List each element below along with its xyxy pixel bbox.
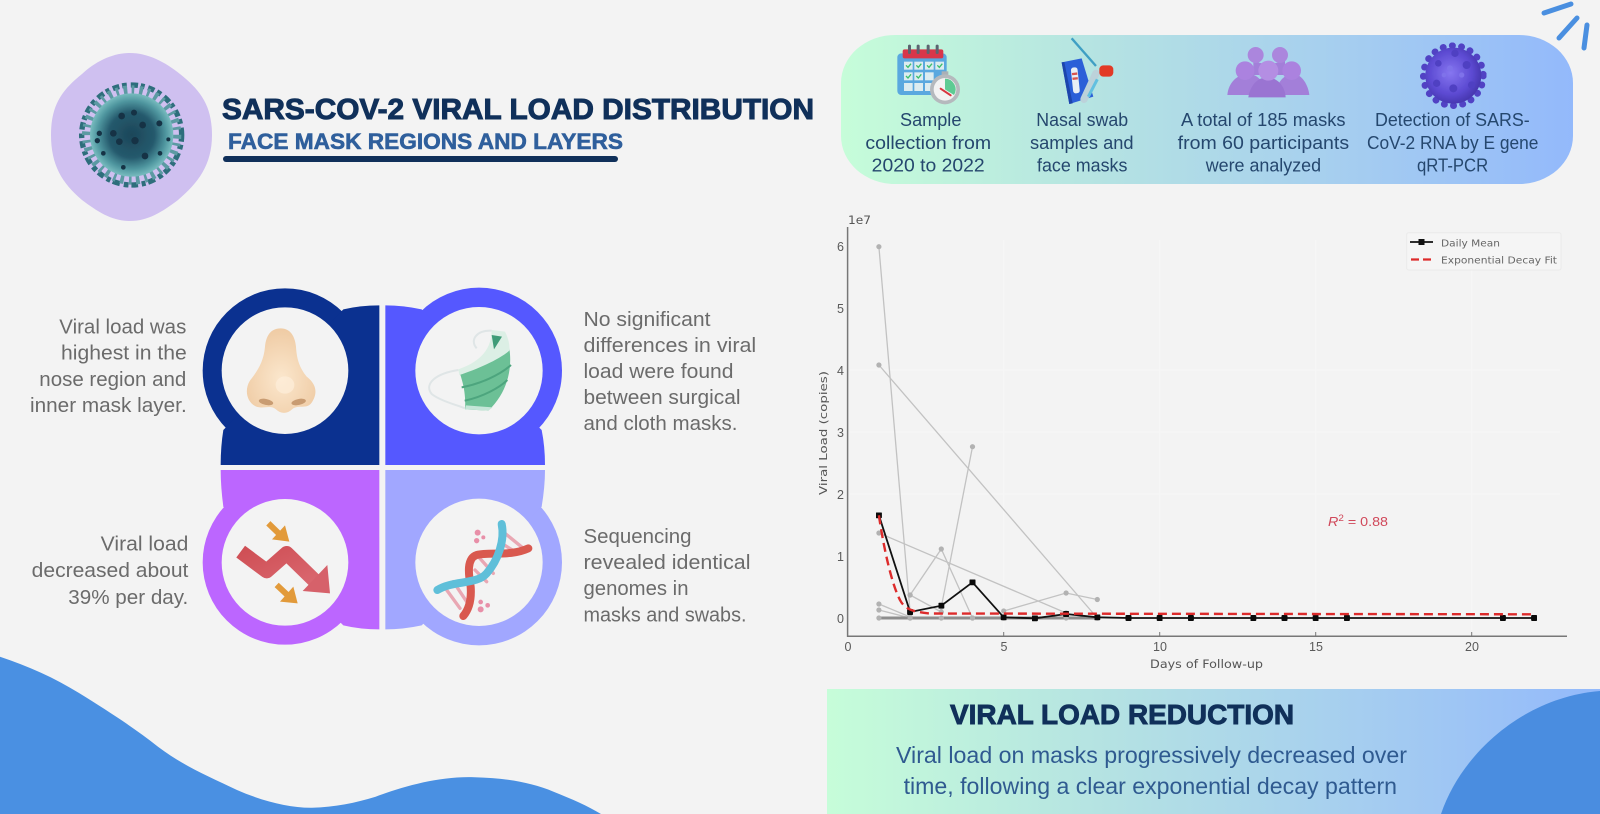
title: SARS-COV-2 VIRAL LOAD DISTRIBUTION [222, 94, 814, 126]
text: sequencing finding [584, 526, 750, 627]
y tick labels: 4 [837, 364, 844, 378]
exponential fit curve [879, 515, 1534, 614]
y tick labels: 5 [837, 302, 844, 316]
text: decline finding: Viral load [101, 534, 188, 556]
x axis title: Days of Follow-up [1150, 657, 1263, 671]
icon: purple virus [1423, 46, 1483, 106]
reduction panel background [827, 689, 1600, 814]
r-squared annotation: R [1328, 514, 1338, 529]
text: decline finding: 39% per day. [68, 587, 188, 609]
icon: surgical mask [429, 330, 511, 411]
quadrant: decline [203, 470, 379, 645]
legend: Daily Mean [1441, 238, 1500, 250]
x tick labels: 15 [1309, 640, 1323, 654]
icon: coronavirus [82, 85, 182, 185]
text: nasal swab: Nasal swab [1036, 110, 1128, 130]
badge blob [51, 53, 212, 221]
text: detection method: qRT-PCR [1417, 156, 1488, 176]
corner blue shape [1441, 691, 1600, 814]
y tick labels: 1 [837, 550, 844, 564]
quadrant: DNA [385, 470, 562, 645]
icon: nose [247, 328, 315, 413]
text: nose finding: nose region and [39, 369, 186, 391]
summary background pill [841, 35, 1573, 184]
text: detection method: CoV-2 RNA by E gene [1367, 133, 1538, 153]
text: participants: from 60 participants [1178, 133, 1349, 153]
daily mean series [879, 515, 1534, 618]
quadrant: mask [385, 288, 562, 465]
axes [848, 227, 1567, 636]
reduction heading: VIRAL LOAD REDUCTION [950, 699, 1294, 730]
text: sample collection: Sample [900, 110, 961, 130]
text: sample collection [865, 110, 991, 176]
quadrant: nose [203, 288, 379, 465]
text: mask type finding: differences in viral [584, 335, 756, 357]
text: participants: were analyzed [1205, 156, 1321, 176]
text: nose finding: highest in the [61, 342, 187, 364]
icon: calendar with stopwatch [897, 45, 960, 104]
icon: DNA helix [437, 524, 528, 616]
y tick labels: 3 [837, 426, 844, 440]
virus badge [51, 53, 212, 221]
text: nasal swab [1030, 110, 1134, 176]
r-squared annotation: 2 [1338, 513, 1344, 523]
subtitle: FACE MASK REGIONS AND LAYERS [228, 129, 623, 154]
text: sample collection: 2020 to 2022 [872, 156, 985, 176]
corner spark marks [1544, 4, 1587, 48]
text: nose finding: inner mask layer. [30, 395, 187, 417]
text: participants [1178, 110, 1349, 176]
subtitle underline [223, 156, 618, 162]
text: nasal swab: samples and [1030, 133, 1134, 153]
text: sequencing finding: revealed identical [584, 552, 750, 574]
text: nasal swab: face masks [1037, 156, 1127, 176]
r-squared annotation: = 0.88 [1344, 514, 1388, 529]
bottom-left wave [0, 657, 601, 814]
icon: downward arrow [241, 523, 330, 603]
legend: Exponential Decay Fit [1441, 256, 1557, 266]
text: mask type finding: No significant [584, 309, 711, 331]
legend [1407, 233, 1561, 270]
y scale exponent: 1e7 [848, 213, 871, 227]
icon: nasal swab kit [1062, 38, 1113, 104]
text: detection method: Detection of SARS- [1375, 110, 1530, 130]
x tick labels: 20 [1465, 640, 1479, 654]
line chart: viral load over follow-up [817, 213, 1567, 671]
text: nose finding [30, 316, 187, 417]
y tick labels [837, 240, 844, 626]
y tick labels: 2 [837, 488, 844, 502]
text: sequencing finding: Sequencing [584, 526, 692, 548]
text: detection method [1367, 110, 1538, 176]
reduction body text: Viral load on masks progressively decreased over [896, 742, 1407, 768]
individual participant series [879, 247, 1097, 618]
text: sequencing finding: masks and swabs. [584, 605, 746, 627]
x tick labels: 0 [845, 640, 852, 654]
panel: study summary [841, 35, 1573, 184]
faint grid [850, 240, 1560, 630]
text: sequencing finding: genomes in [584, 578, 688, 600]
panel: four findings diagram [203, 288, 562, 645]
text: decline finding [32, 534, 189, 609]
text: nose finding: Viral load was [59, 316, 186, 338]
y tick labels: 6 [837, 240, 844, 254]
panel: viral load reduction [827, 689, 1600, 814]
x tick labels: 10 [1153, 640, 1167, 654]
icon: group of people [1227, 47, 1309, 97]
y tick labels: 0 [837, 612, 844, 626]
text: participants: A total of 185 masks [1181, 110, 1346, 130]
text: mask type finding: load were found [584, 361, 734, 383]
x tick labels: 5 [1001, 640, 1008, 654]
text: mask type finding: and cloth masks. [584, 413, 738, 435]
text: sample collection: collection from [865, 133, 991, 153]
text: decline finding: decreased about [32, 560, 189, 582]
text: mask type finding: between surgical [584, 387, 740, 409]
text: mask type finding [584, 309, 756, 435]
reduction body text [896, 742, 1407, 799]
axis ticks [1004, 632, 1472, 636]
reduction body text: time, following a clear exponential decay pattern [904, 773, 1397, 799]
x tick labels [845, 640, 1479, 654]
y axis title: Viral Load (copies) [817, 371, 830, 495]
